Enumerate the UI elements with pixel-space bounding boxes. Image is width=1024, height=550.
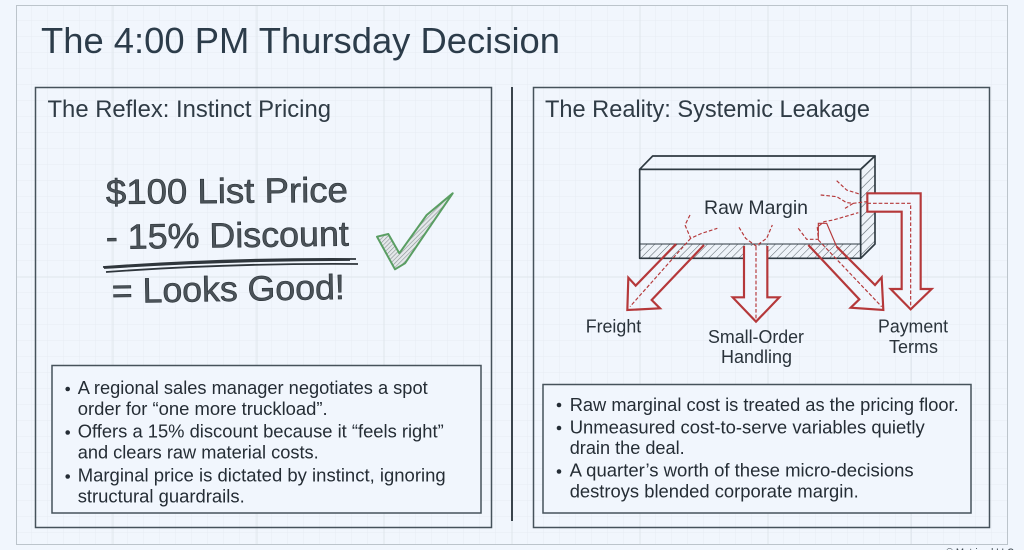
panel: The Reality [534,88,990,528]
arrow: small-order handling leak [733,225,779,322]
hand-drawn calculation [103,171,358,311]
title: The 4:00 PM Thursday Decision [41,20,560,61]
label: Payment Terms [878,316,948,357]
text box: Reality bullets: A quarter’s worth of these micro-decisions [570,460,914,481]
arrow: payment terms leak [821,181,932,309]
label: Raw Margin: Raw Margin [704,197,808,219]
3D margin block [640,156,875,258]
heading: The Reality: The Reality: Systemic Leakage [545,96,870,123]
label: Payment Terms: Terms [889,336,938,357]
hand-drawn calculation: - 15% Discount [106,215,349,257]
panel: The Reflex [36,88,492,528]
label: Freight: Freight [586,316,641,337]
label: Small-Order Handling [708,326,804,367]
diagram: raw margin block with leaks [627,156,932,322]
text box: Reality bullets: drain the deal. [570,437,685,458]
label: Payment Terms: Payment [878,316,948,337]
text box: Reality bullets: Unmeasured cost-to-serve variables quietly [570,416,925,437]
text box: Reflex bullets: Marginal price is dictated by instinct, ignoring [78,465,446,486]
hand-drawn calculation: = Looks Good! [111,268,345,311]
heading: The Reflex: The Reflex: Instinct Pricing [48,96,331,123]
text box: Reflex bullets: and clears raw material costs. [78,442,319,463]
text box: Reality bullets: destroys blended corporate margin. [570,480,859,501]
text box: Reflex bullets: A regional sales manager negotiates a spot [78,377,428,398]
arrow: freight leak [627,215,717,310]
hand-drawn calculation: $100 List Price [106,171,348,212]
icon: green check mark [377,193,453,269]
divider between panels [511,87,513,521]
label: Small-Order Handling: Handling [721,346,792,367]
text box: Reflex bullets: order for “one more truckload”. [78,398,328,419]
label: Small-Order Handling: Small-Order [708,326,804,347]
text box: Reflex bullets: structural guardrails. [78,485,245,506]
text box: Reflex bullets [52,366,481,513]
text box: Reality bullets [543,384,971,513]
arrow: third diagonal leak [798,213,883,310]
text box: Reflex bullets: Offers a 15% discount because it “feels right” [78,421,444,442]
text box: Reality bullets: Raw marginal cost is treated as the pricing floor. [570,394,959,415]
